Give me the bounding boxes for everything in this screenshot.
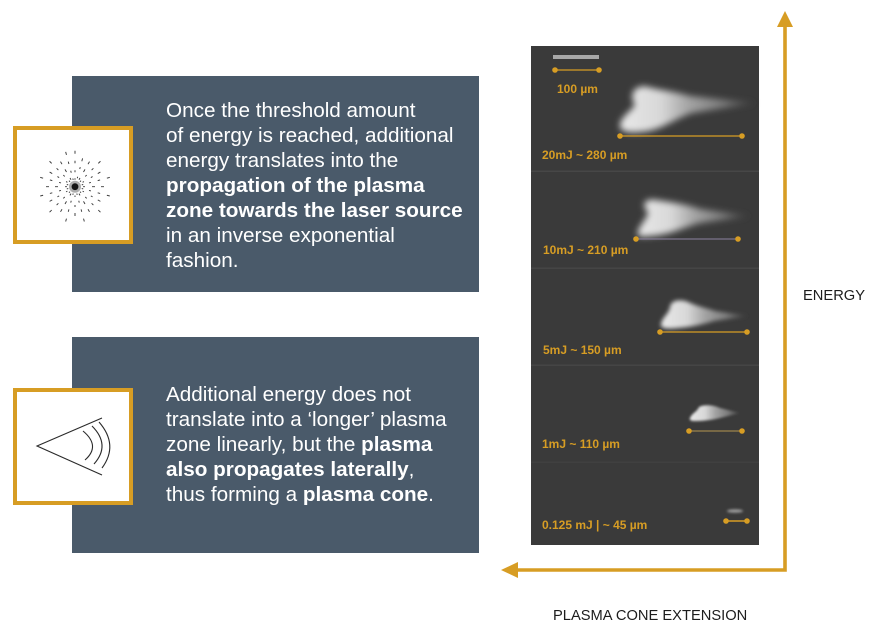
text: plasma cone explanation: thus forming a plasma cone. [166,482,434,506]
scale bar 100 µm: 100 µm [557,82,598,96]
sample: 20 mJ: 20mJ ~ 280 µm [542,148,627,162]
label: energy axis: ENERGY [803,288,865,304]
panel: threshold energy propagation [72,76,479,292]
sample: 5 mJ: 5mJ ~ 150 µm [543,343,622,357]
label: plasma cone extension axis: PLASMA CONE EXTENSION [553,608,747,624]
panel: lateral propagation [72,337,479,553]
text: propagation explanation: fashion. [166,248,238,272]
sample: 10 mJ: 10mJ ~ 210 µm [543,243,628,257]
sample: 10 mJ [543,200,750,257]
icon: plasma cone [13,388,133,505]
icon: radial burst [13,126,133,244]
sample: 0.125 mJ [542,509,750,532]
text: plasma cone explanation: zone linearly, but the plasma [166,432,432,456]
text: propagation explanation: of energy is reached, additional [166,124,454,146]
text: propagation explanation: propagation of the plasma [166,174,425,196]
sample: 0.125 mJ: 0.125 mJ | ~ 45 µm [542,518,647,532]
photo background [531,46,759,545]
sample: 1 mJ: 1mJ ~ 110 µm [542,437,620,451]
text: propagation explanation: zone towards the laser source [166,198,463,222]
text: propagation explanation: in an inverse exponential [166,224,395,246]
text: plasma cone explanation: Additional energy does not [166,382,411,406]
text: propagation explanation [166,98,463,272]
sample: 1 mJ [542,405,745,451]
text: plasma cone explanation [166,382,447,506]
sample: 20 mJ [542,86,756,162]
sample: 5 mJ [543,300,750,357]
text: propagation explanation: energy translates into the [166,148,398,172]
scale bar 100 µm [552,55,602,96]
text: propagation explanation: Once the threshold amount [166,98,416,122]
text: plasma cone explanation: translate into a ‘longer’ plasma [166,408,447,430]
text: plasma cone explanation: also propagates laterally, [166,458,414,480]
